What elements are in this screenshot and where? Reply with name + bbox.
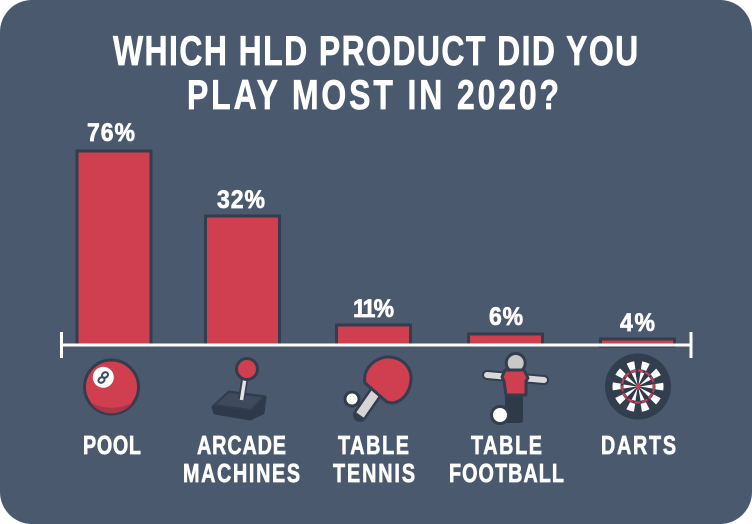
category labels: DARTS xyxy=(601,430,676,460)
icon: arcade joystick xyxy=(213,358,265,419)
category labels xyxy=(83,430,676,488)
category labels: TABLE xyxy=(338,430,409,460)
icon: pool ball xyxy=(84,360,138,414)
value labels: 4% xyxy=(620,309,655,337)
value labels: 11% xyxy=(353,295,394,323)
axis xyxy=(61,332,691,358)
title xyxy=(113,27,638,118)
bar: pool xyxy=(77,151,151,345)
category labels: POOL xyxy=(83,430,141,460)
icon: table tennis bat xyxy=(345,357,411,415)
bar: darts xyxy=(600,339,674,346)
bar: table football xyxy=(468,334,542,345)
value labels: 76% xyxy=(87,119,135,147)
value labels xyxy=(87,119,655,337)
bar: table tennis xyxy=(336,325,410,345)
category labels: TABLE xyxy=(471,430,542,460)
icon: table football player xyxy=(487,354,544,424)
category labels: FOOTBALL xyxy=(449,458,564,488)
category labels: TENNIS xyxy=(333,458,415,488)
bar chart xyxy=(61,151,691,358)
category labels: MACHINES xyxy=(183,458,300,488)
title: WHICH HLD PRODUCT DID YOU xyxy=(113,27,638,74)
title: PLAY MOST IN 2020? xyxy=(187,71,559,118)
category labels: ARCADE xyxy=(197,430,286,460)
value labels: 32% xyxy=(217,186,265,214)
icon: dartboard xyxy=(605,354,671,420)
value labels: 6% xyxy=(489,303,523,331)
bar: arcade machines xyxy=(206,216,280,345)
